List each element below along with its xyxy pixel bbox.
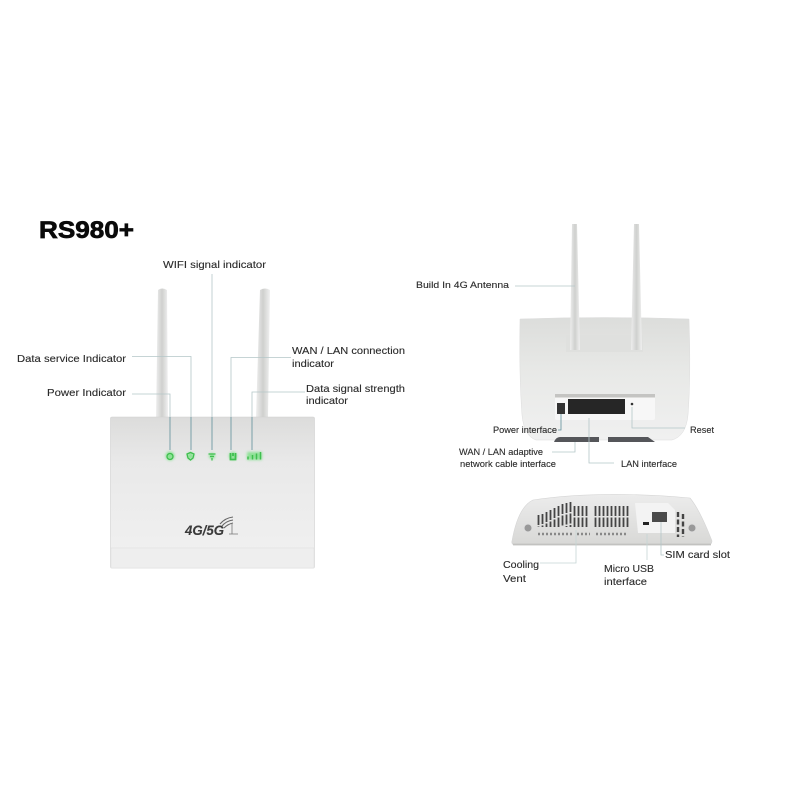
LAN ports [568,399,625,414]
icon: wifi [208,454,216,460]
label: WAN / LAN connection indicator: WAN / LAN connection [292,345,405,357]
icon: WAN/LAN [230,453,236,460]
label: Data signal strength indicator: indicator [306,395,349,407]
cooling vent slots [538,502,628,527]
bottom band [111,548,314,568]
front router [110,288,314,568]
logo: 4G/5G: 4G/5G [184,523,224,538]
left antenna [156,288,168,417]
port panel [555,394,655,420]
label: Cooling Vent: Cooling [503,559,539,571]
label: Data signal strength indicator: Data signal strength [306,383,405,395]
label: Data service Indicator [17,353,191,417]
micro USB [643,522,649,525]
icon: data service [187,452,194,460]
SIM slot [652,512,667,522]
label: SIM card slot: SIM card slot [665,549,730,561]
label: Power interface: Power interface [493,425,557,436]
label: Build In 4G Antenna: Build In 4G Antenna [416,280,510,291]
underside body [512,494,712,545]
label: LAN interface: LAN interface [621,459,677,470]
back router [520,224,690,442]
label: WAN / LAN connection indicator: indicator [292,358,335,370]
port recess [635,503,675,533]
label: Reset: Reset [690,425,714,436]
label: WAN / LAN connection indicator [231,345,405,417]
label: Data signal strength indicator [252,383,405,417]
screw left [524,524,532,532]
label: Power interface [493,414,561,436]
label: Micro USB interface: Micro USB [604,563,654,575]
logo: 4G/5G [184,517,238,538]
right antenna [631,224,642,350]
router body [110,417,314,568]
reset button [631,403,633,405]
power port [557,403,565,414]
label: Data service Indicator: Data service Indicator [17,353,127,365]
icon: signal bars [248,452,260,460]
mount recess [566,335,643,352]
label: WAN / LAN adaptive network cable interface [459,442,575,469]
router back body [520,318,690,440]
indicator line ends on router [170,417,252,450]
label: Micro USB interface: interface [604,576,647,588]
indicator glow [166,452,262,460]
bottom view of router [512,494,712,545]
label: Power Indicator: Power Indicator [47,387,127,399]
label: WAN / LAN adaptive network cable interface: network cable interface [460,459,556,469]
indicator icons [167,452,260,460]
label: SIM card slot [661,522,730,561]
label: WIFI signal indicator: WIFI signal indicator [163,259,267,271]
label: Reset [632,407,714,436]
label: WAN / LAN adaptive network cable interface: WAN / LAN adaptive [459,447,543,457]
label: Cooling Vent [503,530,576,585]
side vents [678,512,683,537]
right antenna [256,288,270,417]
screw right [688,524,696,532]
label: Micro USB interface [604,534,654,588]
feet slots [554,437,655,442]
icon: power [167,454,173,460]
title: RS980+ [39,217,134,244]
label: Power Indicator [47,387,170,417]
label: Cooling Vent: Vent [503,573,526,585]
left antenna [570,224,580,350]
label: LAN interface [589,418,677,470]
lower vent row [538,533,628,535]
